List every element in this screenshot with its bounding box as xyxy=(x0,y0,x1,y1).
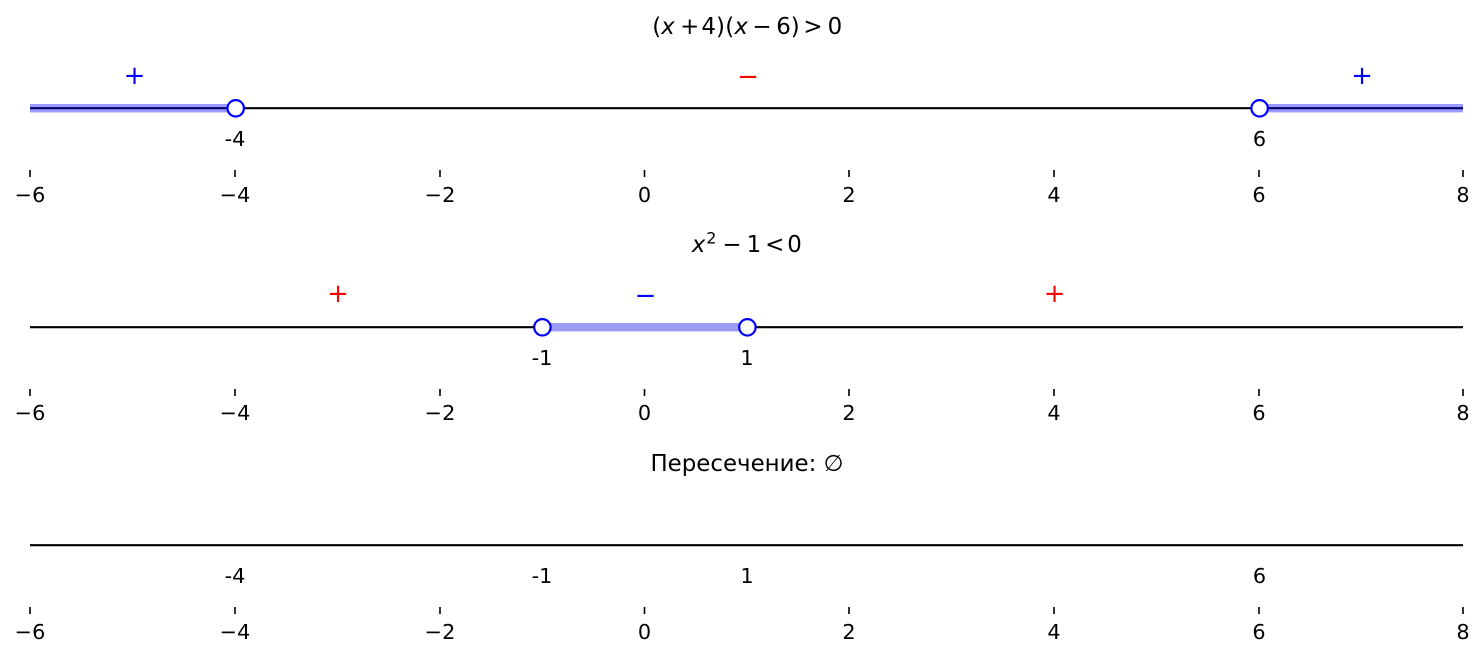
axis ticks and labels 1: 4 xyxy=(1047,183,1061,207)
axis ticks and labels 1: −4 xyxy=(220,183,250,207)
axis ticks and labels 1: −6 xyxy=(15,183,45,207)
axis ticks and labels 1 xyxy=(15,170,1470,207)
axis ticks and labels 3: −4 xyxy=(220,620,250,644)
axis ticks and labels 3 xyxy=(15,607,1470,644)
point label 6: 6 xyxy=(1253,564,1266,588)
axis ticks and labels 3: −2 xyxy=(425,620,455,644)
title: second inequality: x xyxy=(691,232,706,258)
point label 6: 6 xyxy=(1253,127,1266,151)
axis ticks and labels 2: −6 xyxy=(15,401,45,425)
solution band: left ray xyxy=(30,104,235,112)
solution band: right ray xyxy=(1259,104,1463,112)
axis ticks and labels 1: 8 xyxy=(1456,183,1470,207)
number line 3 xyxy=(30,544,1463,546)
number line 1 xyxy=(30,107,1463,109)
sign: minus middle: − xyxy=(737,62,759,92)
axis ticks and labels 3: 2 xyxy=(842,620,856,644)
number line 2 xyxy=(30,326,1463,328)
point label -4: -4 xyxy=(225,564,245,588)
open point at 1 xyxy=(739,319,756,335)
sign: plus left: + xyxy=(124,61,145,91)
title: second inequality: 2 xyxy=(706,228,716,248)
open point at -1 xyxy=(534,319,551,335)
point label -1: -1 xyxy=(532,346,552,370)
axis ticks and labels 3: 8 xyxy=(1456,620,1470,644)
title: first inequality: (x+4)(x−6)>0 xyxy=(652,14,842,40)
title: second inequality xyxy=(691,228,802,258)
panel: first inequality xyxy=(15,14,1470,207)
axis ticks and labels 2: −2 xyxy=(425,401,455,425)
axis ticks and labels 1: −2 xyxy=(425,183,455,207)
axis ticks and labels 3: 6 xyxy=(1252,620,1266,644)
axis ticks and labels 1: 0 xyxy=(638,183,651,207)
axis ticks and labels 2: 2 xyxy=(842,401,856,425)
axis ticks and labels 2: 8 xyxy=(1456,401,1470,425)
axis ticks and labels 1: 2 xyxy=(842,183,856,207)
axis ticks and labels 2: −4 xyxy=(220,401,250,425)
point label 1: 1 xyxy=(740,564,754,588)
point label -4: -4 xyxy=(225,127,245,151)
panel: intersection xyxy=(15,451,1470,644)
point label -1: -1 xyxy=(532,564,552,588)
open point at 6 xyxy=(1251,100,1268,117)
sign: plus right: + xyxy=(1351,61,1373,91)
point label 1: 1 xyxy=(740,346,754,370)
sign: plus right: + xyxy=(1044,279,1065,309)
title: second inequality: −1<0 xyxy=(722,232,802,258)
open point at -4 xyxy=(228,100,244,117)
axis ticks and labels 3: 4 xyxy=(1047,620,1061,644)
sign: minus middle: − xyxy=(635,281,656,311)
axis ticks and labels 2: 0 xyxy=(638,401,651,425)
axis ticks and labels 3: 0 xyxy=(638,620,651,644)
solution band: interval xyxy=(542,323,747,331)
axis ticks and labels 2 xyxy=(15,389,1470,425)
sign: plus left: + xyxy=(327,279,349,309)
title: intersection: Пересечение: ∅ xyxy=(650,451,844,477)
axis ticks and labels 2: 6 xyxy=(1252,401,1266,425)
axis ticks and labels 2: 4 xyxy=(1047,401,1061,425)
panel: second inequality xyxy=(15,228,1470,425)
axis ticks and labels 3: −6 xyxy=(15,620,45,644)
axis ticks and labels 1: 6 xyxy=(1252,183,1266,207)
